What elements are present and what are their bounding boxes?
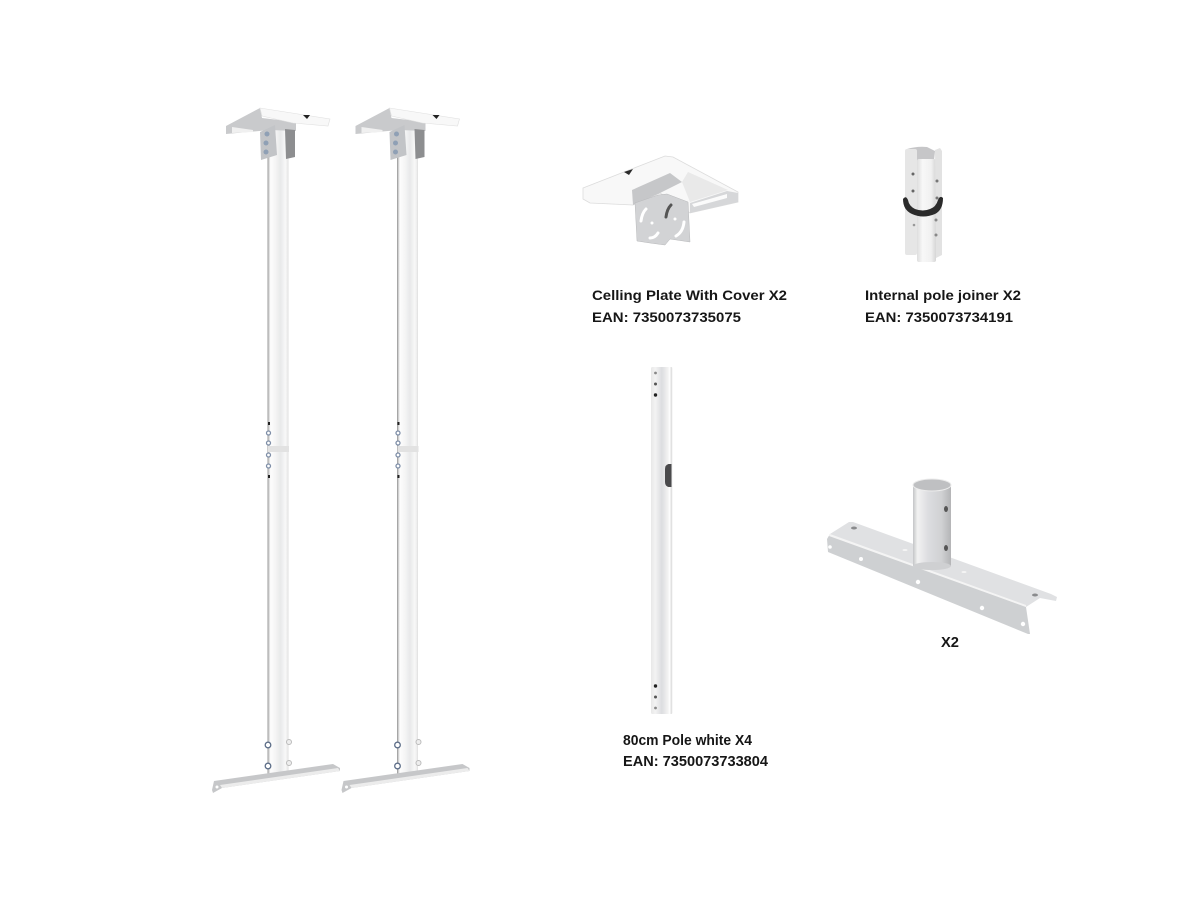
internal pole joiner [903, 147, 943, 262]
ceiling plate with cover [583, 156, 738, 245]
assembled pole right [342, 108, 470, 793]
bracket holes [828, 526, 1038, 626]
label: 80cm pole: EAN: 7350073733804 [623, 754, 768, 770]
80cm pole [651, 367, 672, 714]
label: ceiling plate: EAN: 7350073735075 [592, 309, 741, 325]
rubber ring [903, 197, 943, 216]
label: 80cm pole: 80cm Pole white X4 [623, 733, 752, 749]
mounting bracket [635, 194, 690, 245]
label: T bracket: X2 [941, 634, 959, 651]
pole holes [654, 372, 657, 709]
label: ceiling plate: Celling Plate With Cover X2 [592, 287, 787, 303]
T bracket [827, 479, 1057, 634]
label: joiner [865, 287, 1021, 325]
pole slot [665, 464, 672, 487]
tube [913, 479, 951, 570]
label: ceiling plate [592, 287, 787, 325]
label: 80cm pole [623, 733, 768, 770]
label: joiner: EAN: 7350073734191 [865, 309, 1013, 325]
label: joiner: Internal pole joiner X2 [865, 287, 1021, 303]
assembled pole left [212, 108, 340, 793]
